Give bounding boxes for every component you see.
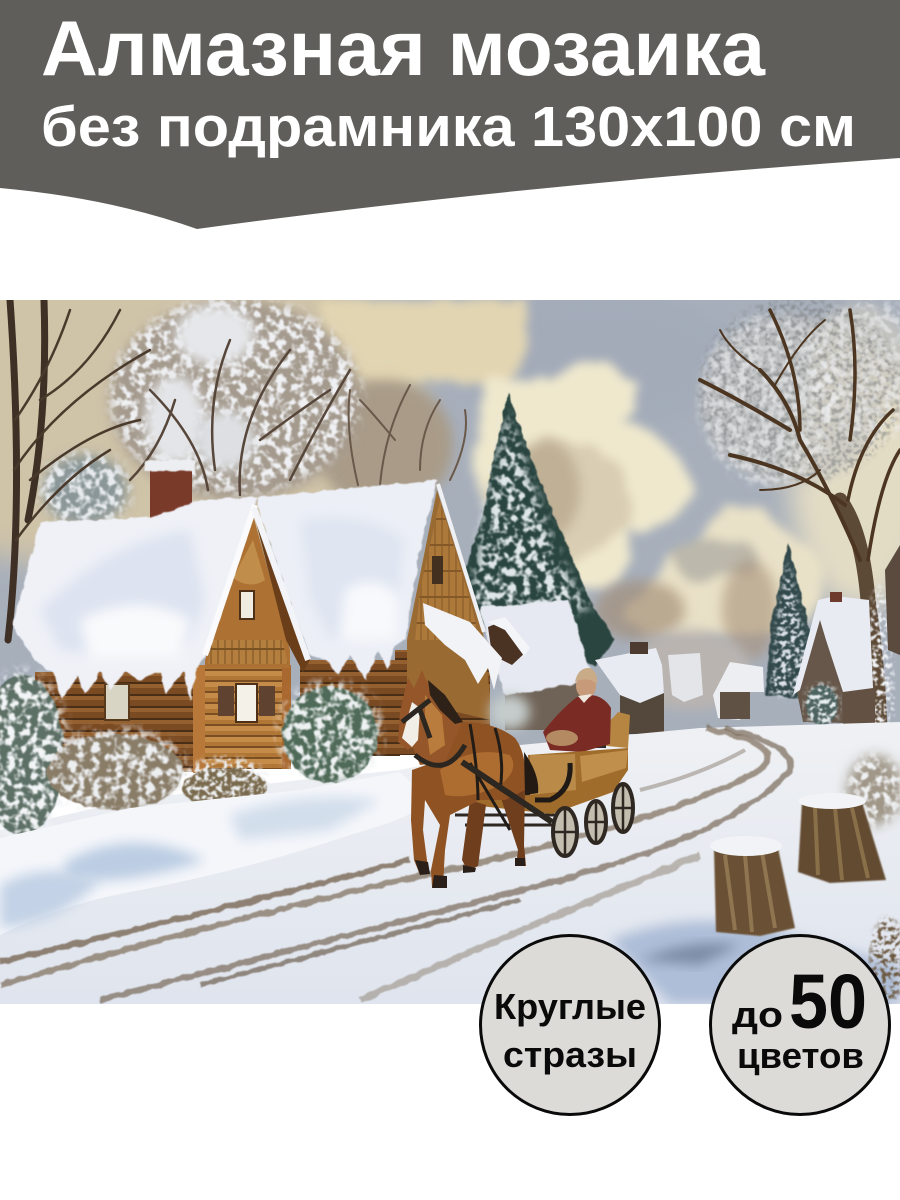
blaze xyxy=(402,702,420,747)
badge: up to 50 colours xyxy=(709,934,891,1116)
title line 1: Алмазная мозаика xyxy=(41,4,766,92)
house right xyxy=(793,592,875,727)
undercarriage xyxy=(455,780,615,825)
head and neck xyxy=(398,670,462,765)
driver head xyxy=(575,668,597,703)
snowy bushes xyxy=(0,670,900,840)
snowy ground xyxy=(0,722,900,1004)
stump front xyxy=(710,836,795,936)
painting: winter village with horse-drawn sleigh xyxy=(0,300,900,1004)
badge: up to 50 colours: до xyxy=(732,994,783,1035)
banner shape xyxy=(0,0,900,229)
gable front xyxy=(205,515,290,668)
log walls xyxy=(35,672,200,772)
backrest xyxy=(597,712,630,748)
wheels xyxy=(553,784,633,856)
body xyxy=(411,722,526,887)
small house far xyxy=(713,662,764,720)
small house white xyxy=(668,653,703,702)
title line 2: без подрамника 130х100 см xyxy=(41,95,856,159)
badge: round rhinestones xyxy=(479,934,661,1116)
tail xyxy=(524,752,538,795)
badge: up to 50 colours: 50 xyxy=(789,959,867,1045)
log house xyxy=(12,460,502,773)
badge: up to 50 colours: цветов xyxy=(737,1035,864,1076)
horse xyxy=(398,670,552,888)
windows xyxy=(240,591,254,619)
right tree with snowy canopy xyxy=(698,298,900,795)
porch roof snow xyxy=(423,603,502,690)
sky xyxy=(0,230,900,750)
stump back xyxy=(798,793,886,883)
house behind sleigh xyxy=(480,600,593,730)
background trees with snow xyxy=(39,297,778,710)
driver hands xyxy=(546,730,578,746)
right gable xyxy=(407,490,490,720)
badge: round rhinestones: Круглые xyxy=(494,986,646,1027)
house edge right xyxy=(885,545,900,655)
harness xyxy=(402,700,465,765)
snow drifts and road xyxy=(0,728,900,1004)
mane xyxy=(428,680,463,724)
fir tree right xyxy=(765,543,812,700)
fir tree centre xyxy=(465,393,615,665)
snow roof middle xyxy=(257,480,437,680)
far legs xyxy=(462,790,526,871)
bare branches xyxy=(8,300,466,640)
snow roof left xyxy=(12,497,257,700)
gable edges xyxy=(205,505,255,655)
chimney xyxy=(150,466,192,524)
driver coat xyxy=(543,695,611,752)
hooves xyxy=(415,858,525,888)
sleigh body xyxy=(474,748,628,814)
distant houses xyxy=(480,545,900,734)
tree stumps xyxy=(710,793,886,936)
clouds xyxy=(320,300,825,640)
sleigh with driver xyxy=(455,668,633,856)
header banner xyxy=(0,0,900,229)
badge: round rhinestones: стразы xyxy=(503,1034,637,1075)
small house centre xyxy=(595,642,664,734)
